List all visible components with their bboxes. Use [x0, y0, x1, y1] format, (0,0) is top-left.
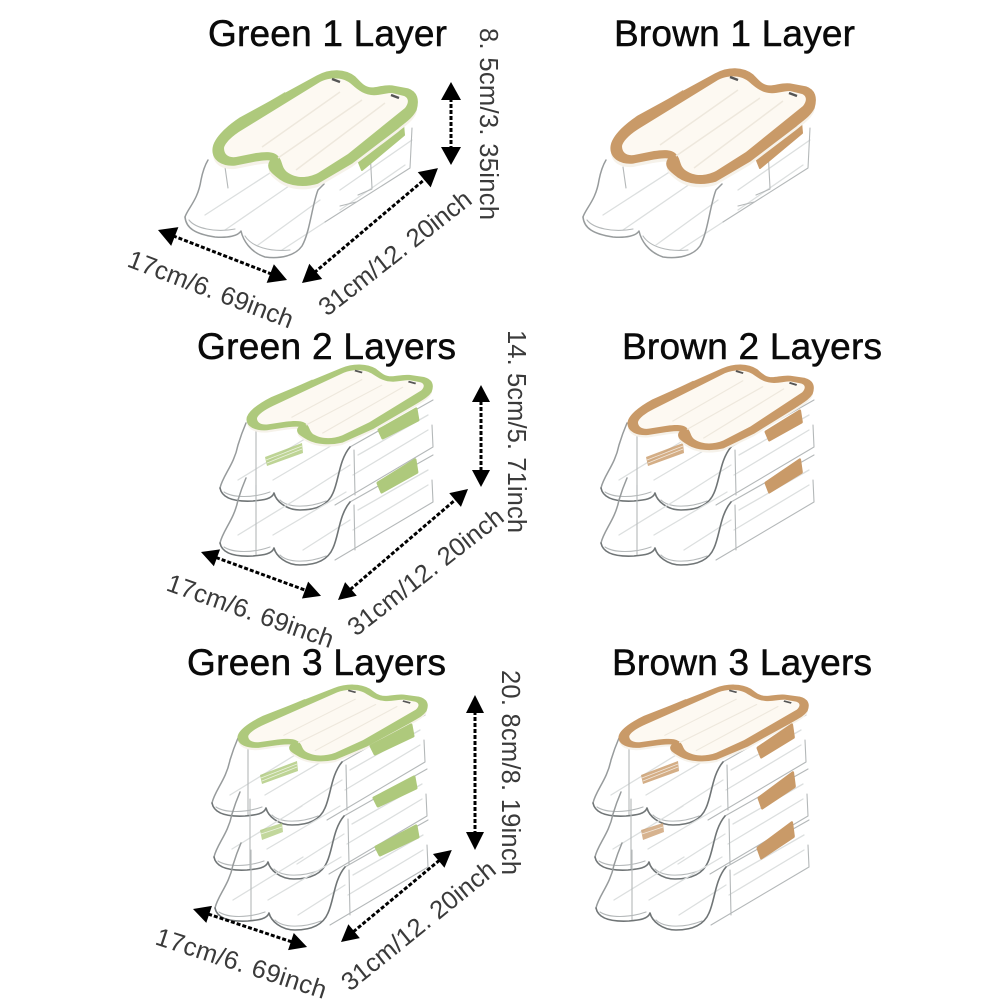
arrow: green 3 width — [190, 900, 310, 955]
heading: Brown 2 Layers: Brown 2 Layers — [622, 326, 882, 367]
product: brown 2 layer tray — [601, 365, 814, 565]
dimension: green 1 length: 31cm/12. 20inch — [313, 185, 477, 322]
heading: Green 2 Layers: Green 2 Layers — [197, 326, 456, 367]
dimension: green 1 height: 8. 5cm/3. 35inch — [474, 28, 502, 220]
heading: Green 3 Layers: Green 3 Layers — [187, 642, 446, 683]
product: green 1 layer tray — [185, 71, 417, 258]
heading: Brown 1 Layer: Brown 1 Layer — [614, 13, 855, 54]
dimension: green 2 width: 17cm/6. 69inch — [163, 569, 337, 654]
product: brown 1 layer tray — [583, 69, 815, 258]
dimension: green 1 width: 17cm/6. 69inch — [124, 245, 297, 334]
arrow: green 2 height — [472, 385, 490, 487]
arrow: green 3 length — [335, 843, 458, 949]
dimension: green 3 height: 20. 8cm/8. 19inch — [496, 670, 524, 875]
arrow: green 1 width — [154, 221, 291, 289]
dimension: green 2 height: 14. 5cm/5. 71inch — [502, 330, 530, 533]
dimension: green 2 length: 31cm/12. 20inch — [342, 503, 509, 642]
arrow: green 1 length — [296, 160, 444, 291]
arrow: green 3 height — [466, 695, 484, 850]
arrow: green 2 width — [198, 544, 324, 604]
arrow: green 2 length — [332, 482, 474, 607]
heading: Brown 3 Layers: Brown 3 Layers — [612, 642, 872, 683]
product: green 3 layer tray — [212, 685, 428, 930]
dimension: green 3 length: 31cm/12. 20inch — [336, 855, 501, 997]
heading: Green 1 Layer: Green 1 Layer — [208, 13, 447, 54]
arrow: green 1 height — [441, 82, 461, 165]
product: brown 3 layer tray — [593, 685, 809, 930]
product: green 2 layer tray — [220, 365, 433, 565]
